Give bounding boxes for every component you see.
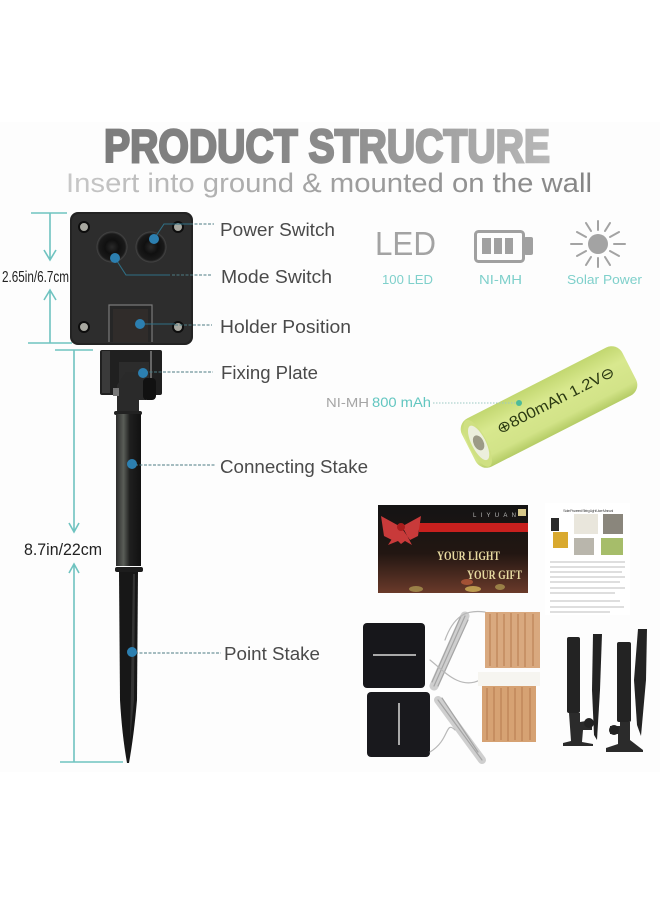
callout labels: Holder Position: [220, 317, 351, 337]
icon: LED: 100 LED: [382, 272, 433, 287]
solar panels: [363, 623, 430, 757]
gift card: LIYUAN: [473, 513, 516, 519]
marker dots: [110, 234, 159, 657]
dimension: stake height: 8.7in/22cm: [24, 541, 102, 559]
battery photo: ⊕800mAh 1.2V⊖: [494, 364, 618, 438]
copper string lights: [478, 612, 540, 742]
subtitle: Insert into ground & mounted on the wall: [66, 168, 592, 198]
fixing plate: [100, 350, 162, 412]
wires: [430, 611, 485, 760]
dimension: panel height: [2, 213, 72, 343]
holder window: [109, 305, 152, 342]
dimension: stake height: [24, 350, 123, 762]
screws: [79, 222, 183, 332]
gift card: YOUR LIGHT: [437, 548, 500, 563]
icon: solar power: [567, 221, 643, 287]
instruction manual: Solar Powered String Light User Manual: [563, 508, 613, 513]
callout labels: Mode Switch: [221, 267, 332, 287]
icon: LED: LED: [375, 225, 436, 262]
connecting stake: [114, 411, 143, 572]
battery callout: NI-MH: [326, 395, 369, 410]
battery callout: [326, 394, 522, 410]
callout labels: Power Switch: [220, 220, 335, 240]
spare stakes: [563, 629, 647, 752]
icon: battery: NI-MH: [479, 272, 522, 287]
point stake: [119, 572, 138, 763]
dimension: panel height: 2.65in/6.7cm: [2, 269, 69, 286]
icon: solar power: Solar Power: [567, 272, 643, 287]
leader lines: [115, 224, 221, 653]
gift card: [378, 505, 528, 593]
knobs: [96, 232, 166, 262]
icon: LED: [375, 225, 436, 287]
icon: battery: [476, 232, 533, 287]
callout labels: [220, 220, 368, 664]
battery callout: 800 mAh: [372, 394, 431, 410]
callout labels: Point Stake: [224, 644, 320, 664]
title: PRODUCT STRUCTURE: [104, 120, 550, 172]
instruction manual: [545, 503, 630, 615]
callout labels: Connecting Stake: [220, 457, 368, 477]
solar panel box: [70, 212, 193, 345]
callout labels: Fixing Plate: [221, 363, 318, 383]
gift card: YOUR GIFT: [467, 567, 522, 582]
battery photo: [457, 342, 641, 472]
